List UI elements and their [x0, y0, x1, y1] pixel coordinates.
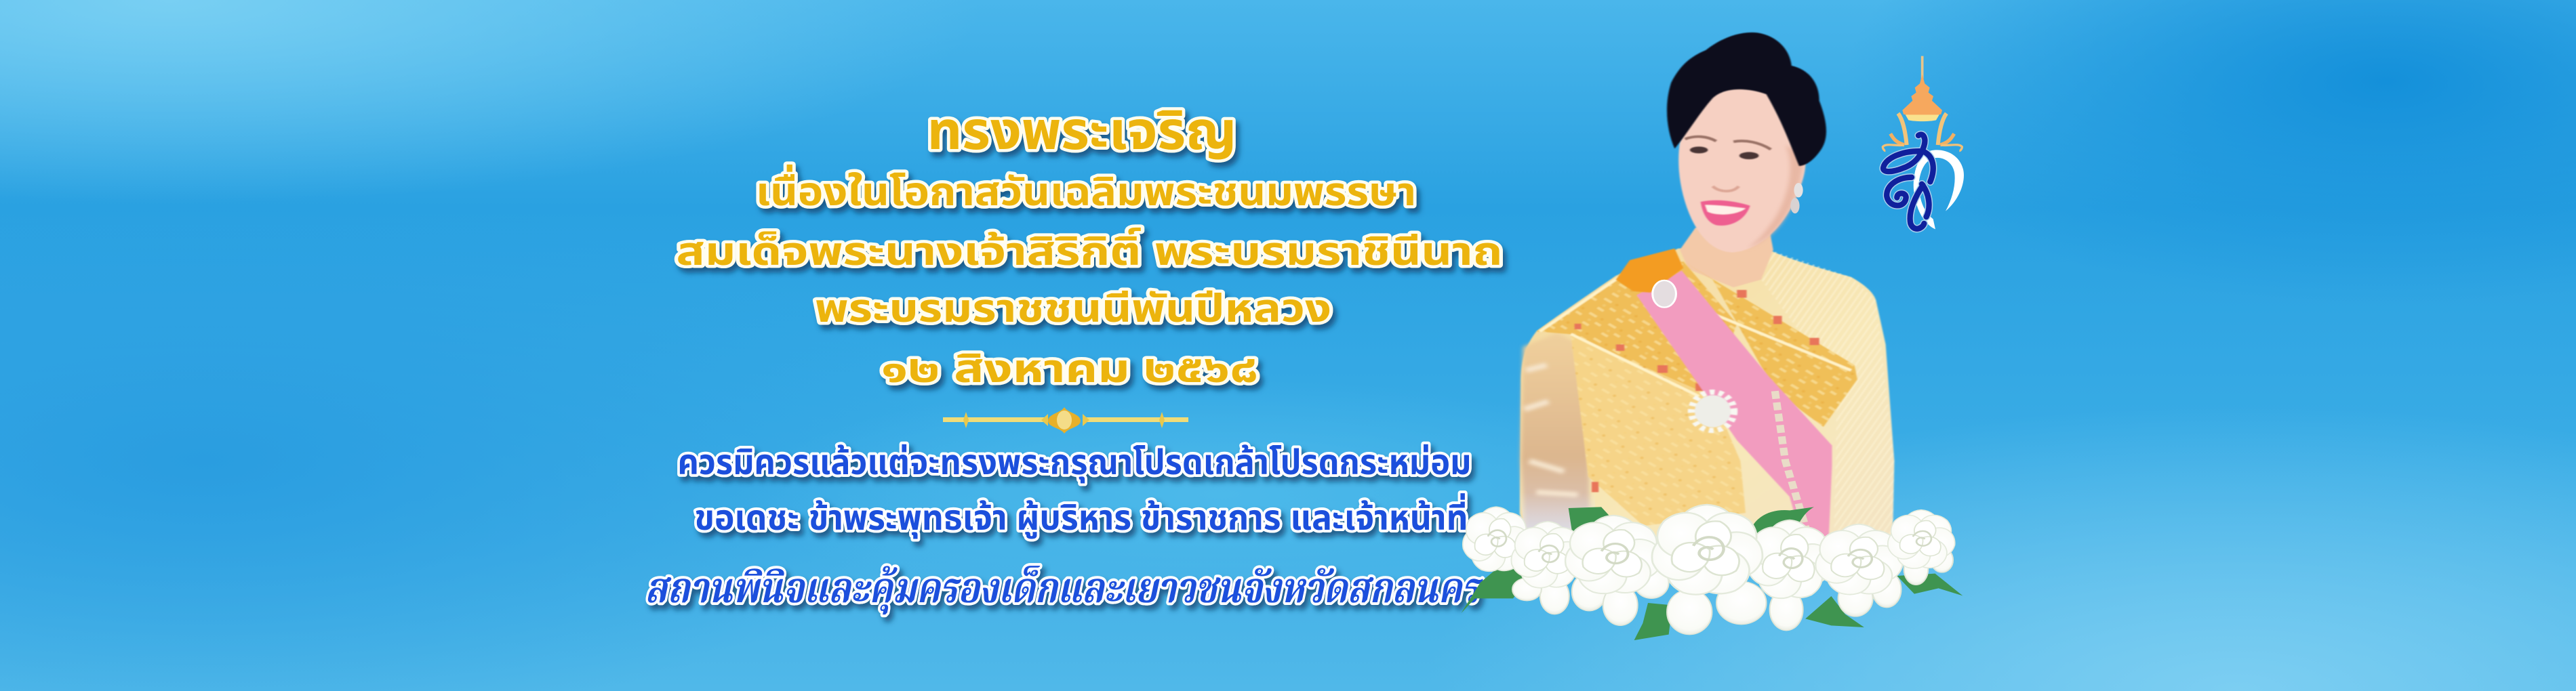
text: organisation name: สถานพินิจและคุ้มครองเด็กและเยาวชนจังหวัดสกลนคร: [645, 566, 1483, 615]
portrait: pink sash: [1636, 270, 1832, 541]
portrait: gold shawl: [1536, 261, 1857, 526]
text: blessing line 1: ควรมิควรแล้วแต่จะทรงพระกรุณาโปรดเกล้าโปรดกระหม่อม: [678, 443, 1471, 483]
text: blessing line 2: ขอเดชะ ข้าพระพุทธเจ้า ผู้บริหาร ข้าราชการ และเจ้าหน้าที่: [694, 493, 1468, 539]
cypher: white arc: [1914, 150, 1964, 229]
garland: hanging buds: [1512, 547, 1953, 635]
portrait: face shadow: [1748, 145, 1805, 249]
gardenia garland: [1459, 503, 1963, 640]
portrait: brows and eyes: [1685, 137, 1771, 191]
portrait: fade to background: [1520, 493, 1595, 541]
portrait: sash chain: [1775, 391, 1806, 528]
ornament divider: [943, 407, 1188, 434]
heading line: date: ๑๒ สิงหาคม ๒๕๖๘: [881, 347, 1258, 391]
portrait: arm fold: [1524, 365, 1578, 495]
garland: green leaves: [1462, 507, 1963, 640]
portrait: blouse: [1520, 249, 1894, 541]
portrait: left arm shading: [1521, 333, 1590, 539]
portrait: hair: [1667, 33, 1826, 166]
portrait of the queen: [1520, 33, 1894, 541]
heading line: queen mother: พระบรมราชชนนีพันปีหลวง: [815, 287, 1331, 331]
portrait: white star ornament: [1691, 392, 1734, 430]
portrait: earring: [1790, 183, 1803, 213]
portrait: medal: [1653, 280, 1676, 308]
cypher: crown: [1883, 56, 1962, 151]
garland: gardenia flowers: [1459, 503, 1958, 605]
heading line: on the occasion of the birthday: เนื่องในโอกาสวันเฉลิมพระชนมพรรษา: [756, 164, 1416, 214]
heading line: queen name: สมเด็จพระนางเจ้าสิริกิติ์ พระบรมราชินีนาถ: [677, 227, 1502, 274]
heading: long live the queen: ทรงพระเจริญ: [927, 101, 1236, 161]
royal cypher: [1883, 56, 1964, 229]
portrait: smile: [1701, 201, 1750, 226]
portrait: neck: [1680, 223, 1773, 287]
portrait: face: [1678, 83, 1805, 253]
cypher: blue monogram: [1883, 135, 1933, 229]
portrait: orange bow: [1616, 249, 1683, 293]
